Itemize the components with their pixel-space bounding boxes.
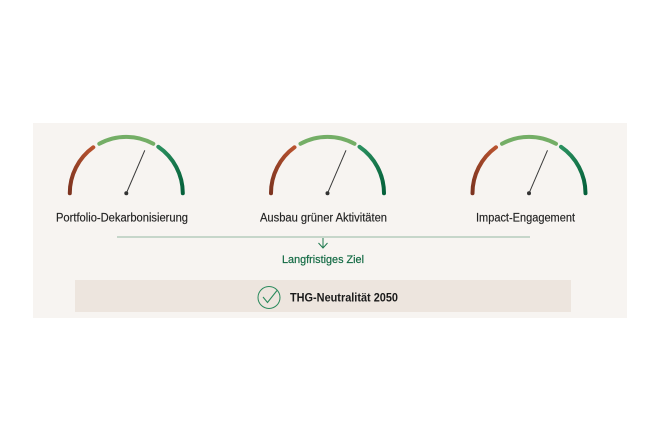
needle — [326, 150, 346, 195]
label: Impact-Engagement: Impact-Engagement — [476, 212, 576, 224]
connector line — [117, 236, 530, 238]
gauge segment: light green — [99, 137, 153, 144]
goal label: THG-Neutralität 2050 — [290, 292, 398, 304]
gauge segment: light green — [502, 137, 556, 144]
gauge: Portfolio-Dekarbonisierung — [70, 137, 183, 195]
gauge segment: dark green — [360, 147, 384, 193]
goal bar — [75, 280, 571, 312]
gauge segment: light green — [300, 137, 354, 144]
label: Ausbau grüner Aktivitäten: Ausbau grüner Aktivitäten — [260, 212, 387, 224]
label: Portfolio-Dekarbonisierung: Portfolio-Dekarbonisierung — [56, 212, 188, 224]
icon: check circle — [258, 286, 280, 308]
panel: background — [33, 123, 627, 318]
arrow: down — [318, 238, 328, 248]
gauge: Impact-Engagement — [472, 137, 586, 195]
gauge segment: dark green — [158, 147, 183, 193]
needle — [527, 150, 548, 195]
heading: Langfristiges Ziel: Langfristiges Ziel — [282, 254, 364, 266]
gauge segment: red — [271, 147, 294, 193]
gauge segment: red — [472, 147, 496, 193]
gauge: Ausbau grüner Aktivitäten — [271, 137, 384, 195]
needle — [124, 150, 145, 195]
gauge segment: red — [70, 147, 93, 193]
gauge segment: dark green — [561, 147, 586, 193]
